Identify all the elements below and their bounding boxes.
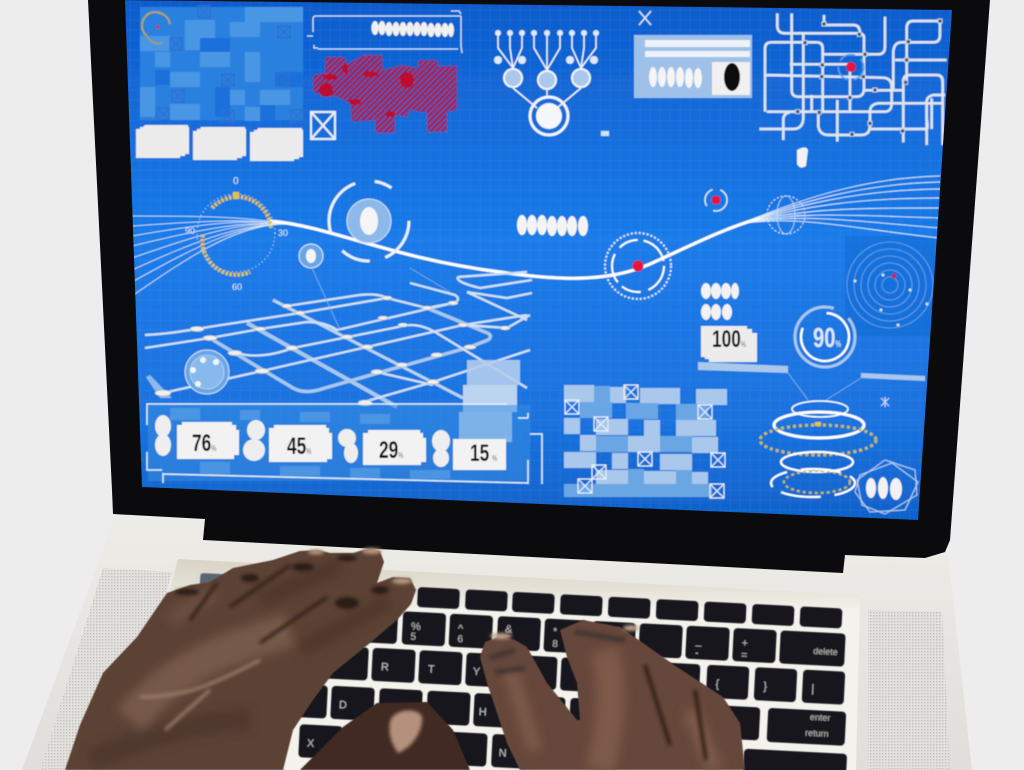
main white wave line (270, 218, 760, 278)
connector lines (788, 373, 861, 400)
stat: 45 percent (243, 420, 332, 462)
90 percent ring: 90% (813, 323, 841, 354)
stat: 29 percent (338, 429, 426, 465)
X mark top (639, 11, 651, 25)
key legends (307, 614, 838, 770)
hexagon badge with blobs (855, 460, 918, 514)
tiny star (881, 397, 889, 407)
key legends: Y (472, 666, 481, 678)
key legends: R (381, 661, 389, 674)
small white blob (797, 148, 808, 168)
finger gaps (645, 665, 706, 760)
pipe network diagram (759, 13, 947, 145)
small circle with blob (299, 244, 323, 268)
stat: 29 percent: 29% (379, 437, 403, 464)
key legends: enter (810, 712, 831, 723)
bracket frame with white label (307, 11, 462, 53)
key legends: return (805, 728, 829, 739)
hand: right (480, 620, 745, 770)
function key row (199, 573, 843, 628)
radial gauge with yellow arc (185, 176, 288, 292)
contour map panel (845, 236, 935, 336)
wave fan lines left (132, 216, 290, 296)
key legends: 6 (457, 634, 464, 645)
letter row ZXCV (298, 724, 847, 770)
back of hand shading (90, 565, 390, 760)
isometric street map (145, 272, 532, 407)
key legends: = (741, 649, 748, 662)
key legends: ^ (458, 623, 464, 635)
X box (311, 112, 335, 139)
stacked ring diagram (760, 401, 876, 497)
bar left (698, 362, 788, 373)
radial gauge with yellow arc: 30 (278, 228, 288, 238)
radial gauge with yellow arc: 90 (185, 226, 195, 236)
bottom stats panel (147, 404, 542, 484)
key legends: } (763, 681, 768, 693)
stat: 100 percent card with blob title (701, 283, 757, 362)
mosaic panel top left (140, 6, 303, 122)
orb with dots (185, 350, 229, 394)
key legends: D (339, 699, 347, 712)
red hatched map (313, 55, 457, 133)
number key row (354, 609, 846, 667)
card with blob text and black icon (634, 35, 752, 98)
thumb nail (389, 710, 422, 753)
key legends: _ (694, 635, 703, 647)
dotted sphere (767, 196, 805, 234)
thumb (300, 702, 470, 770)
letter row ASDF (283, 683, 846, 746)
stat: 45 percent: 45% (287, 433, 311, 460)
radial gauge with yellow arc: 0 (233, 176, 239, 187)
key legends: % (411, 621, 421, 633)
key legends: X (307, 738, 315, 750)
mosaic panel bottom centre (564, 385, 727, 498)
finger nails (308, 548, 412, 584)
key legends: & (505, 623, 513, 636)
letter row QWERTY (324, 645, 845, 705)
centre blob label (517, 215, 588, 236)
key legends: - (695, 647, 699, 659)
white stacked cards top (136, 125, 303, 161)
stat: 76 percent: 76% (192, 430, 216, 457)
knuckle marks (175, 555, 389, 609)
nail highlights (490, 625, 639, 639)
veins (140, 660, 260, 730)
small red target (705, 189, 727, 211)
key legends: * (553, 626, 558, 638)
stat: 15 percent: 15 % (470, 440, 497, 467)
key legends: 5 (410, 632, 417, 643)
segmented ring with blob (329, 181, 409, 261)
stat: 76 percent (155, 415, 239, 459)
thin connector lines (312, 268, 450, 330)
key legends: { (715, 678, 720, 690)
key legends: + (741, 637, 748, 650)
radial gauge with yellow arc: 60 (232, 282, 242, 292)
key legends: 8 (552, 639, 559, 650)
speaker grille right (868, 610, 950, 770)
key legends: T (428, 664, 435, 676)
fingertip smudges (490, 632, 625, 672)
hand: left (65, 548, 470, 770)
key legends: | (811, 683, 815, 695)
finger separations (190, 565, 327, 643)
pale stacked blocks (459, 360, 520, 442)
small tick mark (601, 131, 609, 136)
keyboard (191, 573, 855, 770)
keyboard well (170, 559, 860, 770)
red location dot (846, 62, 856, 72)
laptop base (22, 517, 972, 770)
key legends: H (478, 706, 487, 719)
stat: 15 percent (432, 430, 506, 470)
stat: 100 percent card with blob title: 100% (712, 326, 746, 353)
key legends: N (498, 747, 507, 760)
small gauge top left (142, 12, 170, 43)
network tree diagram (494, 30, 599, 135)
target marker with red dot (605, 233, 671, 299)
laptop lid and black bezel (88, 0, 990, 573)
screen (120, 0, 960, 530)
speaker grille left (40, 568, 172, 770)
wave fan lines right (740, 176, 940, 238)
90 percent ring (795, 307, 855, 367)
key legends: delete (813, 646, 838, 657)
bar right (861, 373, 925, 381)
